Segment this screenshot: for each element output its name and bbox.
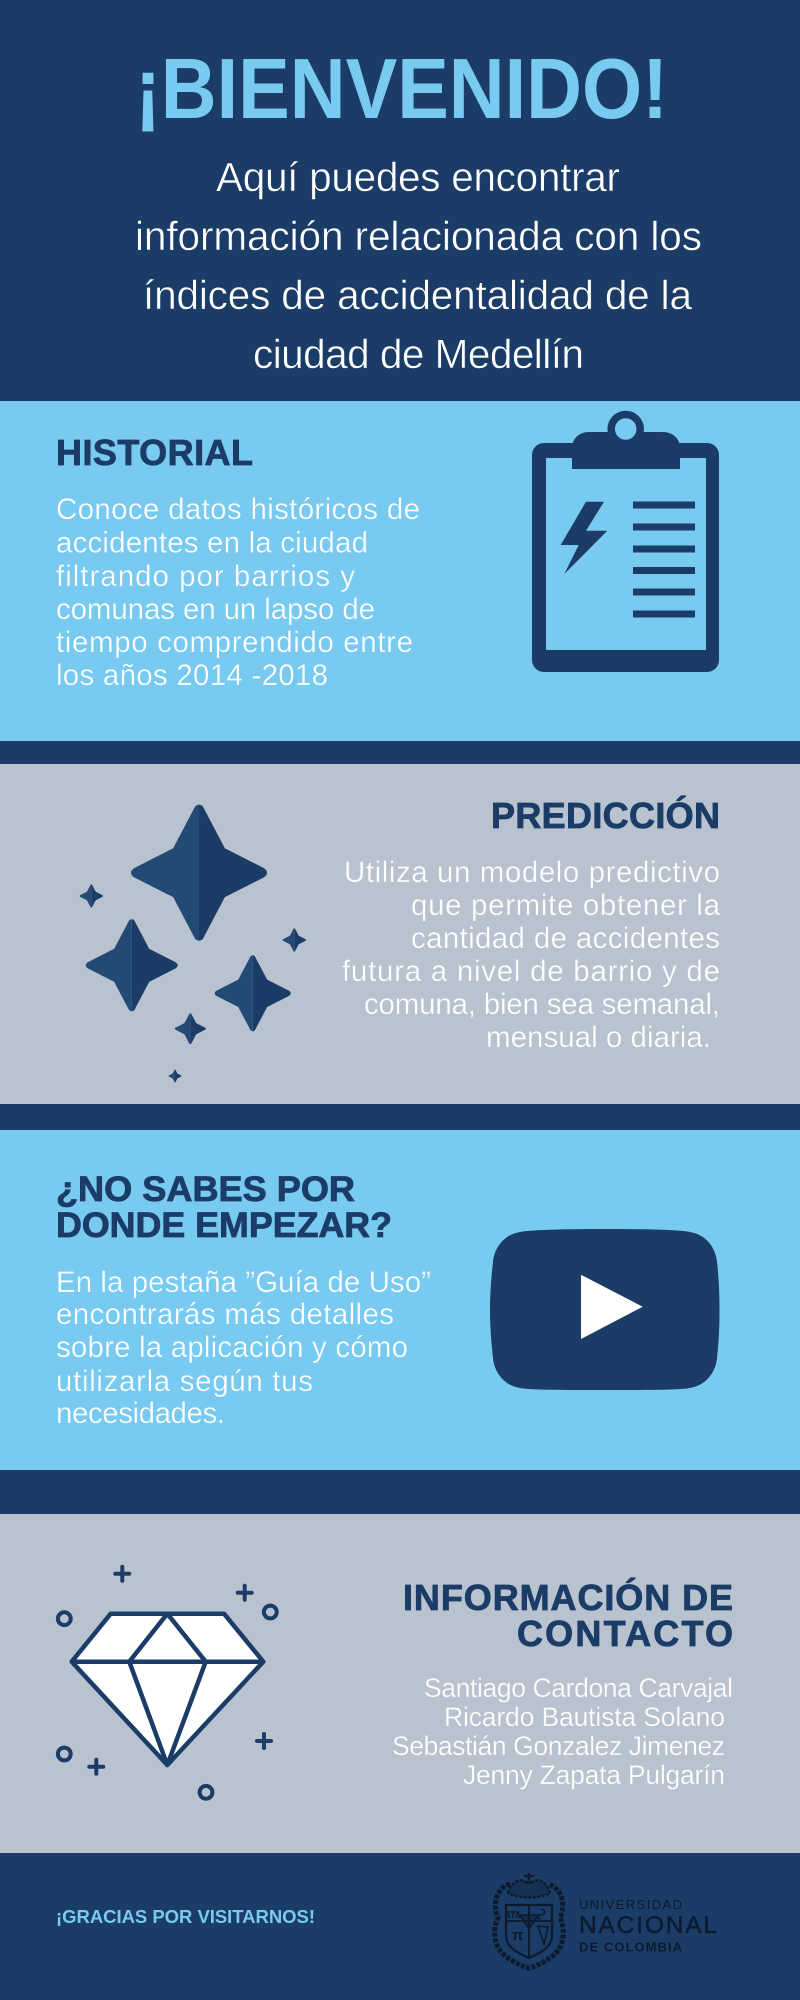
heading: historial: HISTORIAL — [56, 432, 253, 473]
text: guia de uso description: encontrarás más detalles — [56, 1298, 394, 1331]
text: prediccion description: que permite obtener la — [411, 889, 721, 922]
text: prediccion description: Utiliza un modelo predictivo — [344, 856, 720, 889]
panel: header welcome — [0, 0, 800, 401]
text: prediccion description: cantidad de accidentes — [411, 922, 720, 955]
panel: historial — [0, 401, 800, 741]
text: historial description: Conoce datos históricos de — [56, 493, 420, 526]
text: contact names: Santiago Cardona Carvajal — [424, 1673, 733, 1703]
text: guia de uso description: sobre la aplicación y cómo — [56, 1331, 408, 1364]
icon: university crest: π — [512, 1927, 524, 1944]
text: contact names: Sebastián Gonzalez Jimenez — [392, 1731, 725, 1761]
intro text: Aquí puedes encontrar — [216, 154, 620, 200]
text: historial description: comunas en un lapso de — [56, 593, 375, 626]
icon: clipboard — [532, 414, 719, 672]
heading: informacion de contacto: INFORMACIÓN DE — [403, 1576, 733, 1618]
text: historial description: accidentes en la ciudad — [56, 526, 368, 560]
text: prediccion description — [342, 856, 721, 1054]
heading: no sabes por donde empezar: ¿NO SABES POR — [56, 1170, 355, 1209]
text: guia de uso description: utilizarla según tus — [56, 1365, 313, 1398]
panel: no sabes por donde empezar — [0, 1130, 800, 1470]
text: guia de uso description — [56, 1266, 431, 1430]
panel: informacion de contacto — [0, 1514, 800, 1853]
heading: prediccion: PREDICCIÓN — [491, 794, 720, 836]
logo text: universidad nacional de colombia: NACIONAL — [579, 1912, 717, 1939]
heading: informacion de contacto — [403, 1576, 733, 1654]
logo text: universidad nacional de colombia — [579, 1897, 717, 1955]
text: prediccion description: futura a nivel de barrio y de — [342, 955, 720, 988]
text: historial description — [56, 493, 420, 692]
text: historial description: los años 2014 -2018 — [56, 659, 328, 692]
icon: sparkles — [80, 805, 306, 1082]
text: prediccion description: mensual o diaria. — [486, 1021, 711, 1054]
intro text: información relacionada con los — [135, 213, 702, 259]
text: historial description: filtrando por barrios y — [56, 560, 355, 593]
heading: no sabes por donde empezar: DONDE EMPEZAR? — [56, 1206, 392, 1245]
band: navy separators — [0, 741, 800, 1514]
logo text: universidad nacional de colombia: UNIVERSIDAD — [579, 1897, 682, 1912]
icon: video play button — [490, 1229, 720, 1390]
icon: diamond — [58, 1567, 277, 1799]
text: guia de uso description: En la pestaña ”Guía de Uso” — [56, 1266, 431, 1299]
icon: university crest — [495, 1873, 563, 1968]
title: ¡BIENVENIDO! — [135, 42, 668, 137]
text: prediccion description: comuna, bien sea semanal, — [364, 988, 720, 1021]
intro text: ciudad de Medellín — [253, 331, 584, 377]
heading: no sabes por donde empezar — [56, 1170, 392, 1245]
intro text — [135, 154, 702, 377]
heading: informacion de contacto: CONTACTO — [517, 1613, 733, 1654]
text: contact names: Jenny Zapata Pulgarín — [463, 1760, 725, 1790]
text: historial description: tiempo comprendido entre — [56, 626, 413, 659]
text: guia de uso description: necesidades. — [56, 1397, 225, 1430]
text: contact names — [392, 1673, 733, 1790]
text: thanks: ¡GRACIAS POR VISITARNOS! — [56, 1906, 315, 1927]
logo text: universidad nacional de colombia: DE COLOMBIA — [579, 1940, 683, 1955]
intro text: índices de accidentalidad de la — [143, 272, 692, 318]
text: contact names: Ricardo Bautista Solano — [444, 1702, 725, 1732]
panel: footer — [0, 1853, 800, 2000]
panel: prediccion — [0, 764, 800, 1104]
